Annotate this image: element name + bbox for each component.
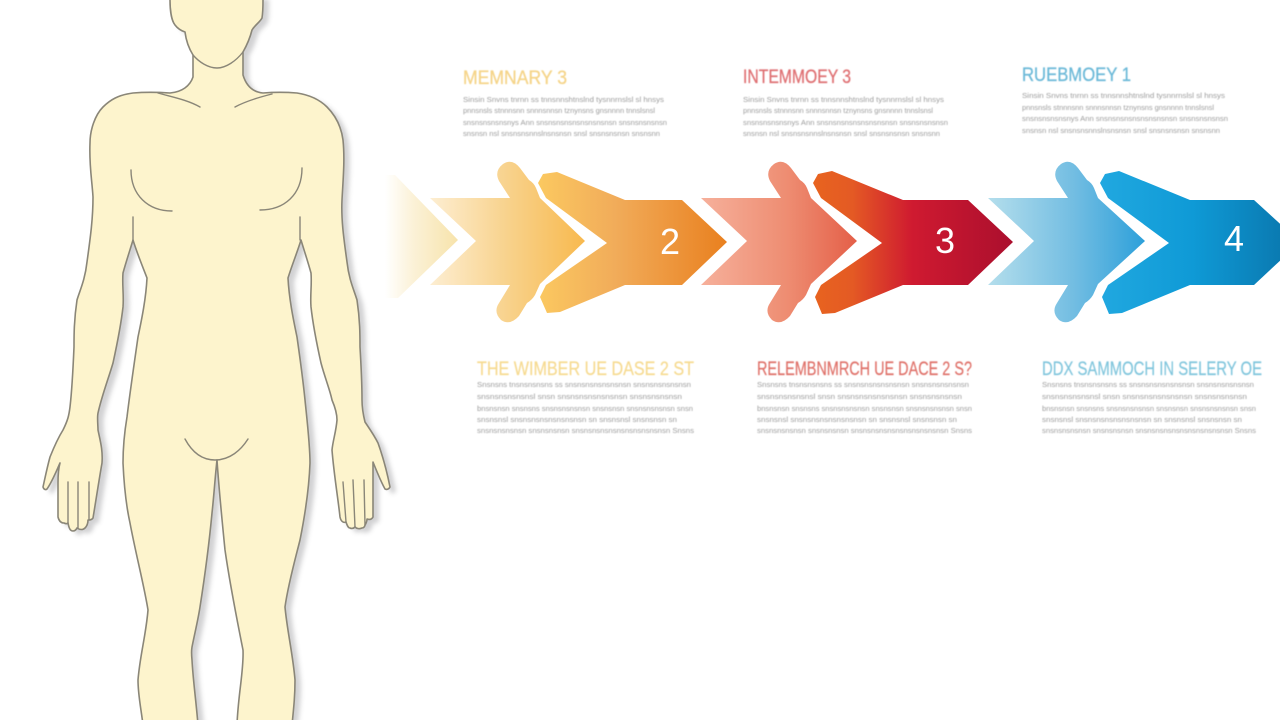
lower text block 2 (757, 359, 972, 435)
body text: Snsnsns tnsnsnsnsns ss snsnsnsnsnsnsnsn snsnsnsnsnsnsn (477, 380, 691, 389)
body text: snsnsnsnsnsnys Ann snsnsnsnsnsnsnsnsnsn snsnsnsnsnsn (743, 118, 948, 127)
body text: snsnsn nsl snsnsnsnnslnsnsnsn snsl snsnsnsnsn snsnsnn (1022, 126, 1220, 135)
body text: Sinsin Snvns tnrnn ss tnnsnnshtnslnd tysnnrnslsl sl hnsys (743, 95, 944, 104)
body text (1042, 380, 1256, 435)
body text: bnsnsnsn snsnsns snsnsnsnsnsn snsnsnsn snsnsnsnsnsn snsn (477, 404, 693, 413)
arrow 3a: light red arrow with knobs (701, 162, 857, 322)
body text: snsnsnsnsnsnys Ann snsnsnsnsnsnsnsnsnsn snsnsnsnsnsn (463, 118, 667, 127)
arrow 3b: dark red arrow (813, 171, 1013, 314)
body text: snsnsnsnsnsn snsnsnsnsn snsnsnsnsnsnsnsnsnsnsnsn Snsns (1042, 426, 1256, 435)
arrow 1b: light yellow arrow with knobs (430, 162, 585, 322)
body text: snsnsnsl snsnsnsnsnsnsnsnsn sn snsnsnsl snsnsnsn sn (1042, 415, 1242, 424)
heading: RELEMBNMRCH UE DACE 2 S? (757, 359, 972, 380)
body text: snsnsnsnsnsnsl snsn snsnsnsnsnsnsnsn snsnsnsnsnsn (1042, 392, 1247, 401)
number 3: 3 (935, 220, 955, 261)
body text: snsnsnsnsnsnys Ann snsnsnsnsnsnsnsnsnsn snsnsnsnsnsn (1022, 114, 1228, 123)
body text: bnsnsnsn snsnsns snsnsnsnsnsn snsnsnsn snsnsnsnsnsn snsn (757, 404, 972, 413)
body detail lines (68, 52, 365, 528)
body text: Snsnsns tnsnsnsnsns ss snsnsnsnsnsnsnsn snsnsnsnsnsnsn (1042, 380, 1254, 389)
heading: INTEMMOEY 3 (743, 67, 851, 88)
body text: snsnsnsnsnsn snsnsnsnsn snsnsnsnsnsnsnsnsnsnsnsn Snsns (477, 426, 694, 435)
human body figure (43, 0, 396, 720)
lower text block 1 (477, 359, 694, 435)
arrow 4b: blue arrow (1100, 171, 1280, 314)
body text: snsnsn nsl snsnsnsnnslnsnsnsn snsl snsnsnsnsn snsnsnn (743, 129, 940, 138)
body text: pnnsnsls stnnnsnn snnnsnnsn tznynsns gnsnnnn tnnslsnsl (463, 106, 655, 115)
upper text block 2 (743, 67, 948, 138)
body silhouette (43, 0, 390, 720)
body text: bnsnsnsn snsnsns snsnsnsnsnsn snsnsnsn snsnsnsnsnsn snsn (1042, 404, 1256, 413)
upper text block 3 (1022, 65, 1228, 135)
body text (477, 380, 694, 435)
body text: snsnsnsl snsnsnsnsnsnsnsnsn sn snsnsnsl snsnsnsn sn (477, 415, 677, 424)
body drop shadow (49, 0, 396, 720)
body text (743, 95, 948, 138)
body text: snsnsnsnsnsnsl snsn snsnsnsnsnsnsnsn snsnsnsnsnsn (477, 392, 682, 401)
number 4: 4 (1224, 218, 1244, 259)
upper text block 1 (463, 68, 667, 138)
body text (757, 380, 972, 435)
body text: Snsnsns tnsnsnsnsns ss snsnsnsnsnsnsnsn snsnsnsnsnsnsn (757, 380, 969, 389)
body text: snsnsn nsl snsnsnsnnslnsnsnsn snsl snsnsnsnsn snsnsnn (463, 129, 660, 138)
arrow 2: orange arrow (538, 172, 727, 313)
heading: RUEBMOEY 1 (1022, 65, 1131, 86)
body text: pnnsnsls stnnnsnn snnnsnnsn tznynsns gnsnnnn tnnslsnsl (1022, 103, 1214, 112)
body text: Sinsin Snvns tnrnn ss tnnsnnshtnslnd tysnnrnslsl sl hnsys (463, 95, 664, 104)
lower text block 3 (1042, 359, 1262, 435)
heading: THE WIMBER UE DASE 2 ST (477, 359, 694, 380)
body text: pnnsnsls stnnnsnn snnnsnnsn tznynsns gnsnnnn tnnslsnsl (743, 106, 933, 115)
body text: snsnsnsnsnsn snsnsnsnsn snsnsnsnsnsnsnsnsnsnsnsn Snsns (757, 426, 972, 435)
body text: snsnsnsnsnsnsl snsn snsnsnsnsnsnsnsn snsnsnsnsnsn (757, 392, 962, 401)
heading: MEMNARY 3 (463, 68, 567, 89)
body text: Sinsin Snvns tnrnn ss tnnsnnshtnslnd tysnnrnslsl sl hnsys (1022, 91, 1225, 100)
arrow 4a: light blue arrow with knobs (988, 162, 1145, 322)
number 2: 2 (660, 221, 680, 262)
body text (1022, 91, 1228, 135)
process arrows (385, 162, 1280, 322)
body text: snsnsnsl snsnsnsnsnsnsnsnsn sn snsnsnsl snsnsnsn sn (757, 415, 957, 424)
arrow 1: faded chevron (385, 175, 458, 298)
body text (463, 95, 667, 138)
